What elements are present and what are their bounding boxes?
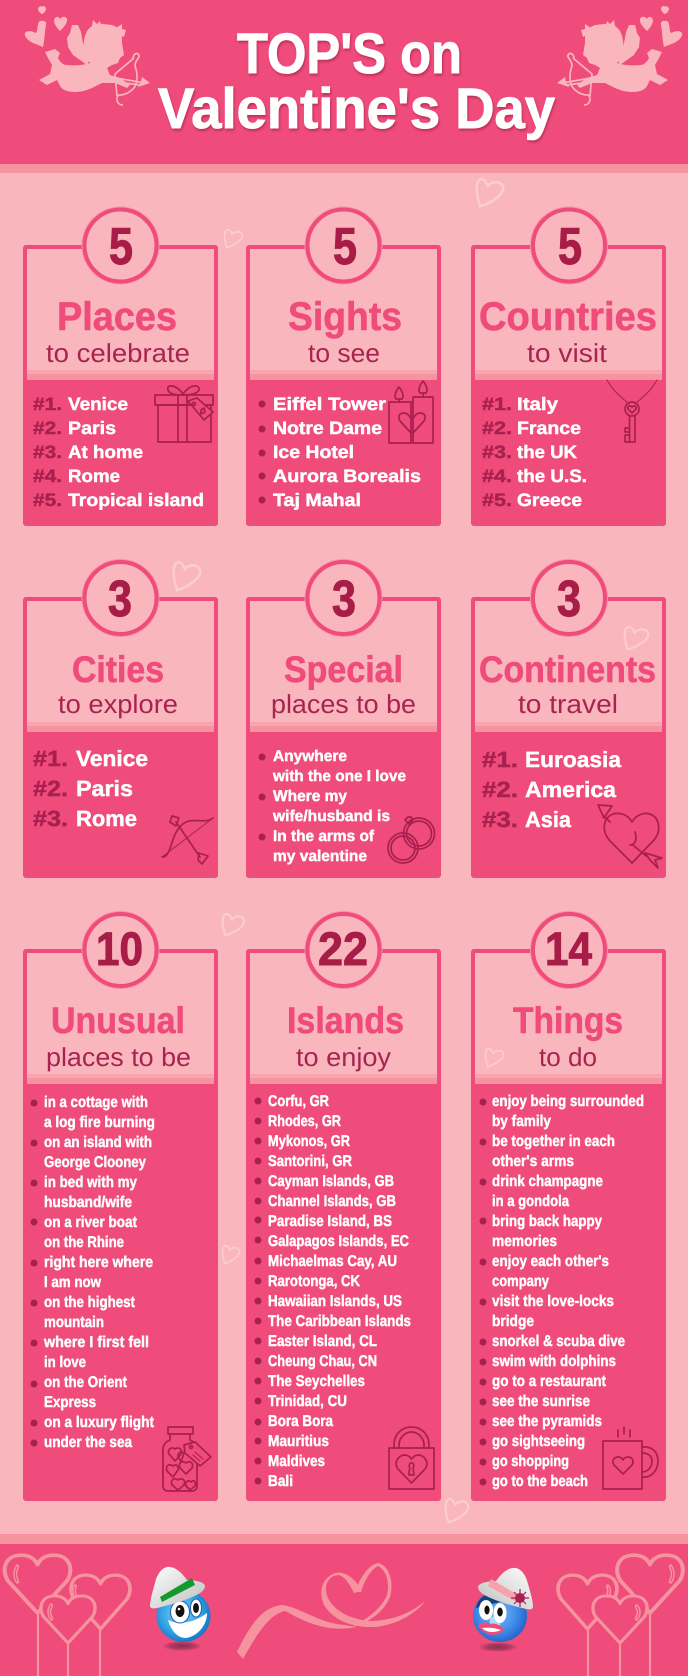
- number badge: [82, 559, 160, 637]
- bullet list: company: [492, 1273, 549, 1290]
- icon: key necklace: [607, 380, 657, 442]
- icon: candles: [389, 381, 433, 443]
- number badge: 5: [558, 218, 582, 276]
- bullet list: bridge: [492, 1313, 534, 1330]
- icon: gift: [155, 386, 213, 442]
- bullet list: Santorini, GR: [268, 1153, 352, 1170]
- number badge: [304, 911, 382, 989]
- card frame: [23, 597, 218, 878]
- heading: Special: [284, 649, 403, 690]
- number badge: [530, 559, 608, 637]
- bullet list: Galapagos Islands, EC: [268, 1233, 409, 1250]
- ranked list: Venice: [68, 394, 128, 414]
- icon: wedding rings: [388, 817, 434, 863]
- bullet list: in a gondola: [492, 1193, 569, 1210]
- card frame: [23, 949, 218, 1501]
- card frame: [246, 597, 441, 878]
- ranked list: Paris: [68, 418, 116, 438]
- decorative outline hearts: [174, 179, 648, 1523]
- ranked list: #2.: [482, 418, 512, 438]
- panel: 14 Things to do: [471, 911, 666, 1501]
- number badge: 22: [318, 922, 368, 975]
- bullet list: Easter Island, CL: [268, 1333, 377, 1350]
- ranked list: Euroasia: [525, 747, 622, 772]
- bullet list: Cayman Islands, GB: [268, 1173, 394, 1190]
- card frame: [471, 949, 666, 1501]
- number badge: 10: [96, 922, 143, 975]
- bullet list: go sightseeing: [492, 1433, 585, 1450]
- panel: 3 Continents to travel: [471, 559, 666, 878]
- card frame: [246, 949, 441, 1501]
- bullet list: [258, 748, 406, 865]
- icon: heart with arrow: [598, 805, 662, 868]
- card frame: [23, 245, 218, 526]
- ranked list: [33, 746, 148, 831]
- heading: Things: [513, 1000, 623, 1041]
- panel: 22 Islands to enjoy: [246, 911, 441, 1501]
- bullet list: enjoy being surrounded: [492, 1093, 644, 1110]
- ranked list: #3.: [482, 442, 512, 462]
- bullet list: Cheung Chau, CN: [268, 1353, 377, 1370]
- bullet list: right here where: [44, 1254, 153, 1271]
- subheading: places to be: [271, 689, 416, 719]
- bullet list: Where my: [273, 788, 347, 805]
- icon: jar of hearts: [163, 1427, 211, 1491]
- subheading: places to be: [46, 1042, 191, 1072]
- subheading: to do: [539, 1042, 597, 1072]
- subheading: to travel: [518, 689, 618, 719]
- bullet list: Hawaiian Islands, US: [268, 1293, 402, 1310]
- bullet list: with the one I love: [272, 768, 406, 785]
- icon: globe with lips and hat: [473, 1568, 533, 1652]
- ranked list: the U.S.: [517, 466, 587, 486]
- card frame: [246, 245, 441, 526]
- title: [158, 22, 555, 141]
- bullet list: Express: [44, 1394, 96, 1411]
- bullet list: memories: [492, 1233, 557, 1250]
- bullet list: go shopping: [492, 1453, 569, 1470]
- bullet list: see the pyramids: [492, 1413, 602, 1430]
- subheading: to see: [308, 338, 380, 368]
- ribbon heart: [237, 1563, 425, 1659]
- ranked list: #2.: [482, 777, 518, 802]
- ranked list: [482, 747, 622, 832]
- bullet list: [480, 1093, 644, 1490]
- bullet list: Aurora Borealis: [273, 466, 421, 486]
- bullet list: The Caribbean Islands: [268, 1313, 411, 1330]
- number badge: [304, 206, 382, 284]
- bullet list: enjoy each other's: [492, 1253, 609, 1270]
- bullet list: on the Orient: [44, 1374, 127, 1391]
- bullet list: be together in each: [492, 1133, 615, 1150]
- bullet list: mountain: [44, 1314, 104, 1331]
- number badge: 3: [332, 570, 356, 627]
- card frame: [471, 597, 666, 878]
- ranked list: #2.: [33, 418, 62, 438]
- number badge: 5: [109, 218, 133, 276]
- bullet list: Trinidad, CU: [268, 1393, 347, 1410]
- ranked list: #4.: [33, 466, 62, 486]
- bullet list: other's arms: [492, 1153, 574, 1170]
- icon: bow and arrow: [162, 816, 213, 864]
- ranked list: #5.: [482, 490, 512, 510]
- bullet list: husband/wife: [44, 1194, 132, 1211]
- number badge: [82, 206, 160, 284]
- icon: mug with heart: [603, 1427, 658, 1489]
- bullet list: [254, 1093, 411, 1490]
- bullet list: In the arms of: [273, 828, 375, 845]
- number badge: 3: [557, 570, 581, 627]
- ranked list: #1.: [33, 394, 62, 414]
- title: Valentine's Day: [158, 77, 555, 141]
- bullet list: on a luxury flight: [44, 1414, 154, 1431]
- bullet list: my valentine: [273, 848, 367, 865]
- bullet list: a log fire burning: [44, 1114, 155, 1131]
- bullet list: on an island with: [44, 1134, 152, 1151]
- panel: 10 Unusual places to be: [23, 911, 218, 1501]
- bullet list: Anywhere: [273, 748, 347, 765]
- number badge: [82, 911, 160, 989]
- bullet list: Rarotonga, CK: [268, 1273, 361, 1290]
- heading: Islands: [287, 1000, 404, 1041]
- heading: Continents: [479, 649, 656, 690]
- footer banner: [0, 1534, 688, 1676]
- number badge: [530, 206, 608, 284]
- bullet list: Paradise Island, BS: [268, 1213, 392, 1230]
- icon: cupid left: [25, 6, 150, 105]
- ranked list: Rome: [76, 806, 137, 831]
- bullet list: in a cottage with: [44, 1094, 148, 1111]
- ranked list: Greece: [517, 490, 582, 510]
- bullet list: Michaelmas Cay, AU: [268, 1253, 397, 1270]
- bullet list: by family: [492, 1113, 551, 1130]
- bullet list: in bed with my: [44, 1174, 137, 1191]
- bullet list: Bali: [268, 1473, 293, 1490]
- heading: Countries: [479, 295, 657, 339]
- heading: Places: [57, 295, 177, 339]
- bullet list: on a river boat: [44, 1214, 137, 1231]
- bullet list: Mykonos, GR: [268, 1133, 350, 1150]
- ranked list: the UK: [517, 442, 577, 462]
- bullet list: go to the beach: [492, 1473, 588, 1490]
- bullet list: [258, 394, 421, 510]
- number badge: [304, 559, 382, 637]
- bullet list: visit the love-locks: [492, 1293, 614, 1310]
- panel: 3 Cities to explore: [23, 559, 218, 878]
- bullet list: Corfu, GR: [268, 1093, 329, 1110]
- card frame: [471, 245, 666, 526]
- bullet list: drink champagne: [492, 1173, 603, 1190]
- number badge: 5: [333, 218, 357, 276]
- heading: Sights: [288, 295, 402, 339]
- icon: smiling globe with hat: [150, 1567, 210, 1651]
- bullet list: [30, 1094, 155, 1451]
- ranked list: #3.: [33, 806, 68, 831]
- ranked list: #5.: [33, 490, 62, 510]
- ranked list: #3.: [33, 442, 62, 462]
- ranked list: Tropical island: [68, 490, 204, 510]
- bullet list: Notre Dame: [273, 418, 382, 438]
- bullet list: George Clooney: [44, 1154, 146, 1171]
- bullet list: on the Rhine: [44, 1234, 124, 1251]
- bullet list: under the sea: [44, 1434, 132, 1451]
- ranked list: [33, 394, 204, 510]
- ranked list: #4.: [482, 466, 512, 486]
- ranked list: Rome: [68, 466, 120, 486]
- bullet list: bring back happy: [492, 1213, 602, 1230]
- bullet list: I am now: [44, 1274, 102, 1291]
- bullet list: The Seychelles: [268, 1373, 365, 1390]
- icon: cupid right: [557, 6, 682, 105]
- subheading: to explore: [58, 689, 178, 719]
- ranked list: America: [525, 777, 617, 802]
- bullet list: Mauritius: [268, 1433, 329, 1450]
- bullet list: Taj Mahal: [273, 490, 361, 510]
- bullet list: Channel Islands, GB: [268, 1193, 396, 1210]
- ranked list: Asia: [525, 807, 572, 832]
- header banner: [0, 0, 688, 173]
- icon: balloon hearts left: [5, 1555, 130, 1676]
- ranked list: France: [517, 418, 581, 438]
- bullet list: wife/husband is: [272, 808, 390, 825]
- icon: heart padlock: [389, 1427, 434, 1489]
- subheading: to enjoy: [296, 1042, 391, 1072]
- panel: 5 Places to celebrate: [23, 206, 218, 526]
- ranked list: #3.: [482, 807, 518, 832]
- panel: 5 Sights to see: [246, 206, 441, 526]
- bullet list: swim with dolphins: [492, 1353, 616, 1370]
- ranked list: #1.: [33, 746, 68, 771]
- panel: 5 Countries to visit: [471, 206, 666, 526]
- number badge: 3: [108, 570, 132, 627]
- ranked list: [482, 394, 587, 510]
- bullet list: snorkel & scuba dive: [492, 1333, 625, 1350]
- ranked list: #1.: [482, 394, 512, 414]
- bullet list: Ice Hotel: [273, 442, 354, 462]
- subheading: to visit: [527, 338, 608, 368]
- icon: balloon hearts right: [558, 1555, 683, 1676]
- number badge: [530, 911, 608, 989]
- heading: Unusual: [51, 1000, 185, 1041]
- heading: Cities: [72, 649, 164, 690]
- panel: 3 Special places to be: [246, 559, 441, 878]
- bullet list: on the highest: [44, 1294, 135, 1311]
- subheading: to celebrate: [46, 338, 190, 368]
- bullet list: where I first fell: [43, 1334, 149, 1351]
- bullet list: in love: [44, 1354, 86, 1371]
- ranked list: Italy: [517, 394, 558, 414]
- ranked list: Paris: [76, 776, 133, 801]
- ranked list: #1.: [482, 747, 518, 772]
- ranked list: Venice: [76, 746, 148, 771]
- bullet list: see the sunrise: [492, 1393, 590, 1410]
- bullet list: Bora Bora: [268, 1413, 333, 1430]
- title: TOP'S on: [237, 22, 462, 86]
- number badge: 14: [545, 922, 592, 975]
- bullet list: Maldives: [268, 1453, 325, 1470]
- bullet list: go to a restaurant: [492, 1373, 606, 1390]
- ranked list: #2.: [33, 776, 68, 801]
- ranked list: At home: [68, 442, 143, 462]
- bullet list: Eiffel Tower: [273, 394, 386, 414]
- bullet list: Rhodes, GR: [268, 1113, 341, 1130]
